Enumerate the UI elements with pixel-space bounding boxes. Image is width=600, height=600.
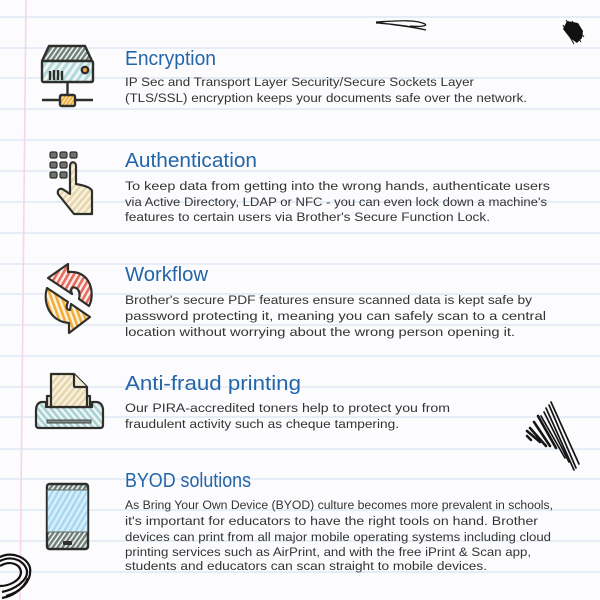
text: BYOD body: it's important for educators to have the right tools on hand. Brother	[125, 514, 538, 528]
icon: network server	[42, 46, 93, 106]
scribble: right middle	[527, 402, 579, 470]
text: Workflow body	[125, 293, 546, 339]
text: Encryption body: (TLS/SSL) encryption keeps your documents safe over the network.	[125, 91, 527, 105]
icon: circular arrows	[46, 264, 92, 333]
text: Anti-fraud body: Our PIRA-accredited toners help to protect you from	[125, 401, 450, 415]
text: Authentication body: via Active Directory, LDAP or NFC - you can even lock down a machine's	[125, 195, 547, 209]
scribble: top right	[563, 20, 584, 44]
section: Workflow	[46, 264, 546, 339]
scribble: top centre	[376, 21, 426, 30]
text: BYOD body: students and educators can scan straight to mobile devices.	[125, 559, 487, 573]
text: BYOD body: As Bring Your Own Device (BYOD) culture becomes more prevalent in schools,	[125, 498, 553, 512]
text: Authentication body	[125, 179, 550, 224]
section: Encryption	[42, 46, 527, 106]
section: Authentication	[50, 150, 550, 224]
icon: printer	[36, 374, 103, 428]
text: BYOD body: printing services such as AirPrint, and with the free iPrint & Scan app,	[125, 545, 531, 559]
scribble: bottom left	[0, 555, 30, 598]
text: Workflow body: Brother's secure PDF features ensure scanned data is kept safe by	[125, 293, 533, 307]
text: Workflow body: location without worrying about the wrong person opening it.	[125, 325, 515, 339]
heading: Anti-fraud printing: Anti-fraud printing	[125, 373, 301, 395]
text: Authentication body: features to certain users via Brother's Secure Function Lock.	[125, 210, 490, 224]
text: Encryption body: IP Sec and Transport Layer Security/Secure Sockets Layer	[125, 75, 474, 89]
text: Anti-fraud body	[125, 401, 450, 431]
heading: Authentication: Authentication	[125, 150, 257, 172]
heading: Workflow: Workflow	[125, 264, 209, 286]
text: BYOD body: devices can print from all major mobile operating systems including cloud	[125, 530, 551, 544]
section: Anti-fraud printing	[36, 373, 450, 431]
text: Encryption body	[125, 75, 527, 105]
icon: tablet device	[47, 484, 88, 549]
text: Workflow body: password protecting it, meaning you can safely scan to a central	[125, 309, 546, 323]
text: BYOD body	[125, 498, 553, 573]
text: Authentication body: To keep data from getting into the wrong hands, authenticate users	[125, 179, 550, 193]
heading: BYOD solutions: BYOD solutions	[125, 470, 251, 492]
icon: hand on keypad	[50, 152, 92, 214]
heading: Encryption: Encryption	[125, 48, 216, 70]
text: Anti-fraud body: fraudulent activity such as cheque tampering.	[125, 417, 399, 431]
section: BYOD solutions	[47, 470, 553, 573]
